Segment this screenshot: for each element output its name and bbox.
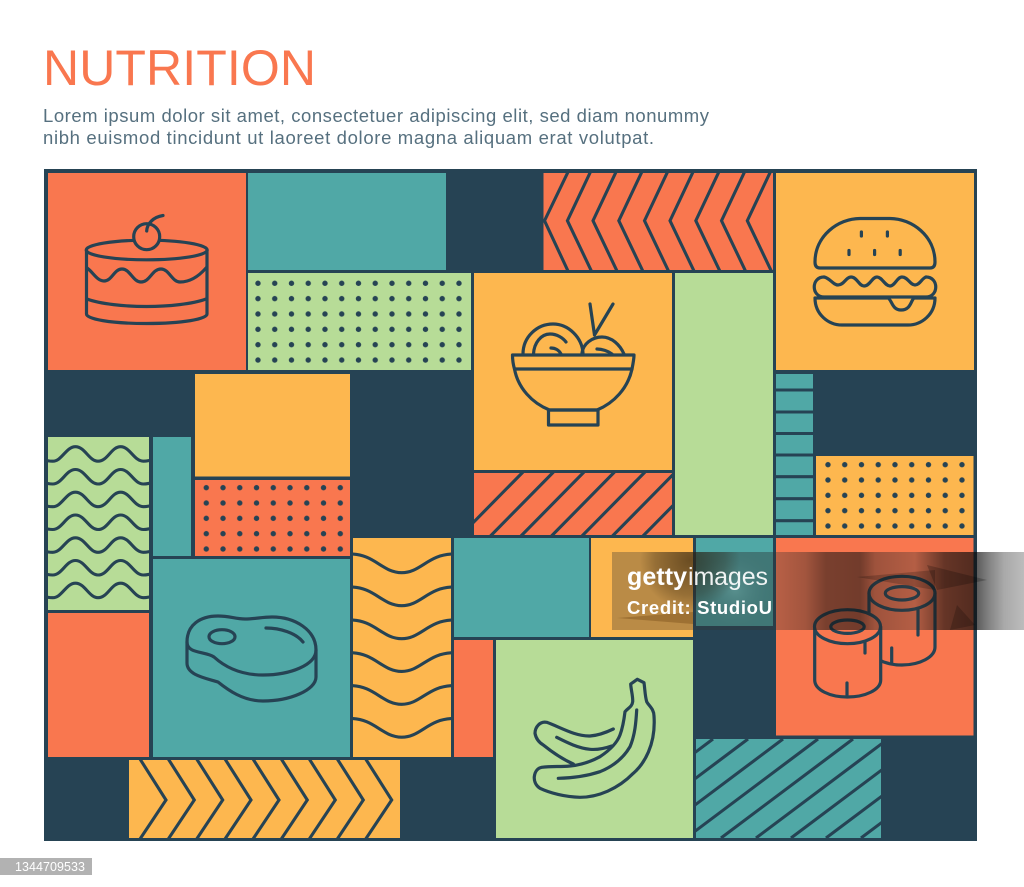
icon: cake bbox=[86, 216, 207, 324]
icon: sushi rolls bbox=[814, 576, 935, 697]
icon: burger bbox=[814, 218, 936, 325]
panel: yellow waves bbox=[350, 538, 454, 757]
panel: green dots bbox=[248, 273, 471, 370]
panel: orange chevrons bbox=[544, 172, 773, 271]
panel: orange narrow block bbox=[454, 640, 493, 757]
panel: orange dots bbox=[195, 480, 350, 556]
panel: yellow block bbox=[195, 374, 350, 476]
panel: burger bbox=[776, 173, 974, 370]
icon: bowl with noodles bbox=[512, 304, 634, 425]
panel: yellow small block bbox=[591, 538, 693, 637]
subtitle text block: Lorem ipsum dolor sit amet, consectetuer adipiscing elit, sed diam nonummy bbox=[43, 105, 710, 126]
panel: steak bbox=[153, 559, 350, 757]
panel: teal mid block bbox=[454, 538, 589, 637]
panel: cake bbox=[48, 173, 246, 370]
panel: teal hatched bbox=[696, 739, 881, 838]
panel: noodle bowl bbox=[474, 273, 672, 470]
subtitle text block: nibh euismod tincidunt ut laoreet dolore magna aliquam erat volutpat. bbox=[43, 127, 654, 148]
watermark credit text: Credit: StudioU bbox=[627, 597, 772, 618]
panel: green tall block bbox=[675, 273, 773, 535]
panel: sushi rolls bbox=[776, 538, 974, 736]
watermark logo text: images bbox=[688, 563, 768, 591]
mosaic frame bbox=[44, 169, 993, 841]
watermark bbox=[612, 552, 1024, 630]
image id label bbox=[0, 858, 92, 875]
panel: orange block bbox=[48, 613, 149, 757]
panel: teal narrow block bbox=[153, 437, 191, 556]
panel: teal block bbox=[248, 173, 446, 270]
panel: teal small block bbox=[696, 538, 773, 626]
icon: bananas bbox=[534, 679, 654, 797]
image id label: 1344709533 bbox=[15, 860, 85, 874]
watermark logo text: getty bbox=[627, 563, 687, 591]
panel: green waves bbox=[44, 437, 153, 610]
panel: banana bbox=[496, 640, 693, 838]
title: NUTRITION bbox=[43, 40, 316, 96]
panel: orange diagonal stripes bbox=[474, 473, 672, 535]
icon: steak bbox=[187, 616, 316, 701]
panel: yellow dots bbox=[816, 456, 974, 535]
panel: teal striped column bbox=[776, 374, 815, 535]
subtitle text block bbox=[43, 105, 710, 148]
panel: yellow chevrons bbox=[129, 759, 400, 839]
